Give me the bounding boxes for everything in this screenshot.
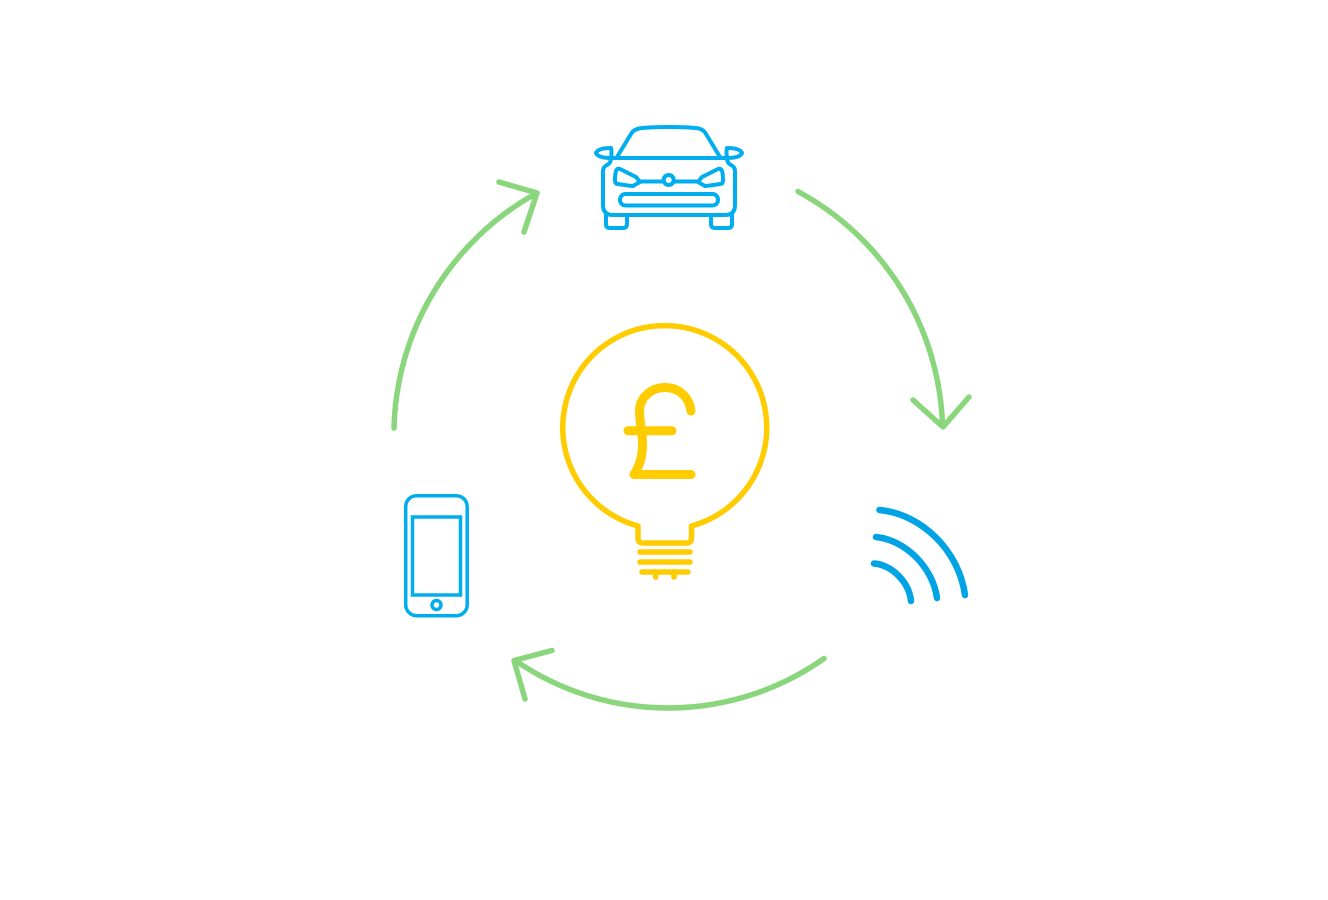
arrow: car to wifi — [798, 192, 969, 427]
bulb screw base — [640, 552, 690, 577]
arrow: wifi to phone — [514, 650, 824, 708]
icon: smartphone — [406, 496, 467, 616]
bulb outline — [563, 326, 767, 543]
icon: light bulb with pound sign — [563, 326, 767, 577]
icon: car — [596, 127, 742, 228]
icon: wifi signal — [874, 510, 965, 601]
pound sign — [628, 388, 691, 474]
arrow: phone to car — [394, 182, 537, 428]
